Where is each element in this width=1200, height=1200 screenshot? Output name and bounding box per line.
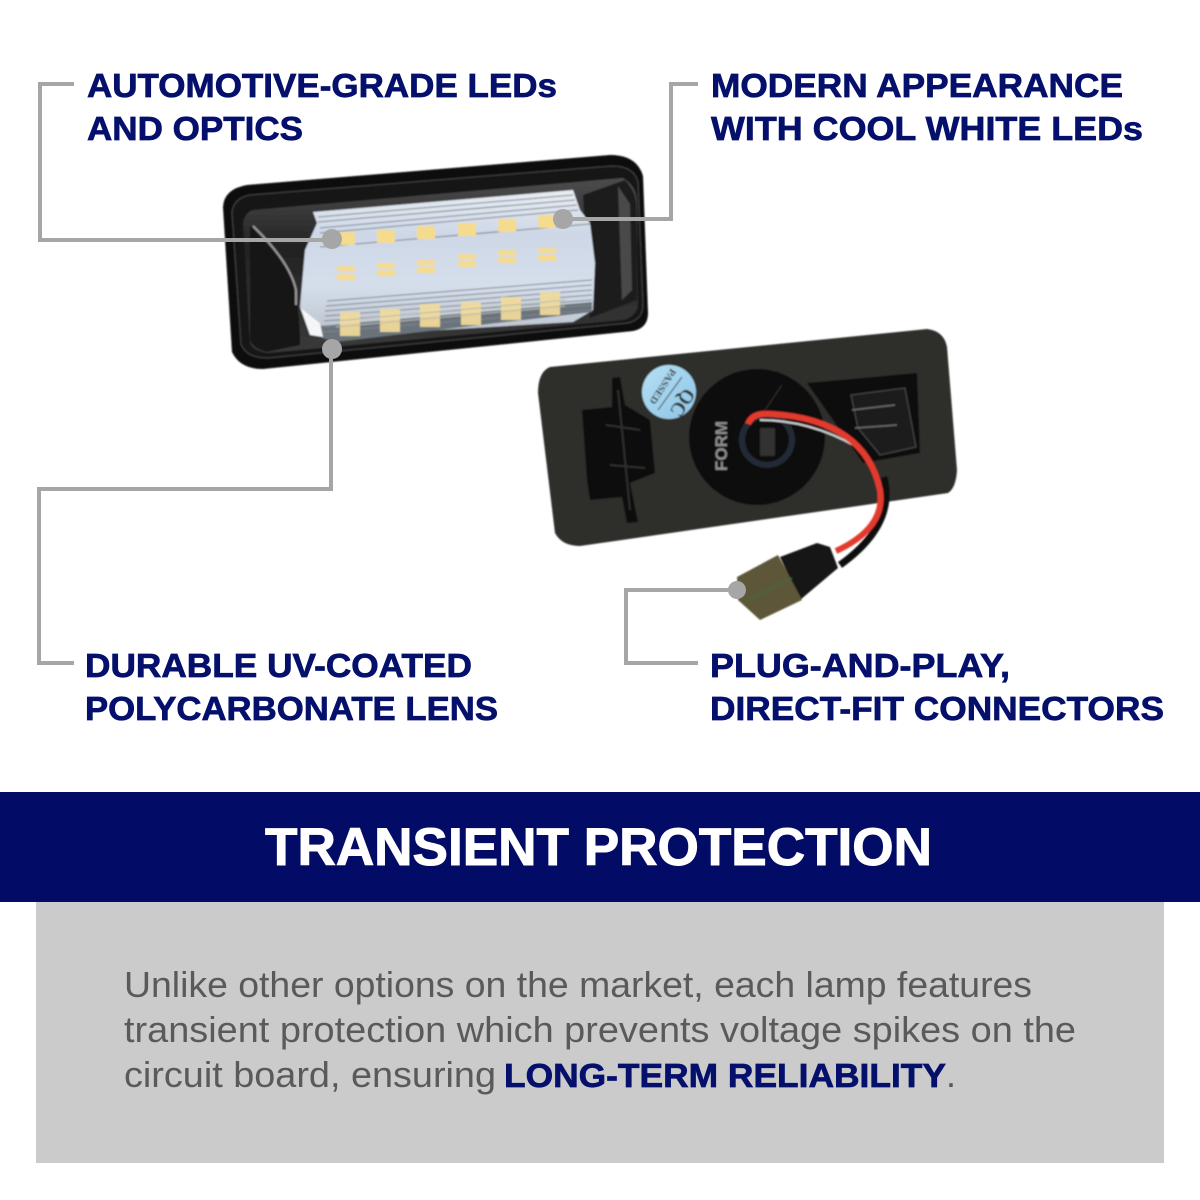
LED rows: [337, 215, 556, 280]
callout: automotive-grade LEDs and optics: [40, 67, 557, 249]
panel: description: circuit board, ensuring: [124, 1054, 496, 1095]
round grommet: [689, 369, 825, 505]
connector circuit board: [737, 555, 802, 620]
callout: durable lens: [39, 339, 498, 727]
photo: rear of licence plate lamp: QC: [665, 384, 699, 421]
photo: rear of licence plate lamp: [538, 329, 957, 620]
callout: modern appearance: MODERN APPEARANCE: [711, 67, 1123, 104]
panel: description: .: [946, 1054, 956, 1095]
callout: durable lens: POLYCARBONATE LENS: [85, 690, 498, 727]
panel: description: LONG-TERM RELIABILITY: [504, 1057, 946, 1094]
LED circuit board: [300, 190, 595, 337]
callout: plug-and-play connectors: PLUG-AND-PLAY,: [710, 647, 1010, 684]
panel: description: [36, 902, 1164, 1163]
photo: rear of licence plate lamp: PASSED: [647, 366, 678, 406]
callout: automotive-grade LEDs and optics: AUTOMOTIVE-GRADE LEDs: [87, 67, 557, 104]
callout: modern appearance: WITH COOL WHITE LEDs: [711, 110, 1143, 147]
panel: description: Unlike other options on the market, each lamp features: [124, 964, 1032, 1005]
callout: modern appearance: [553, 67, 1143, 229]
callout: plug-and-play connectors: [626, 581, 1164, 727]
QC sticker: [642, 365, 696, 419]
connector sleeve: [780, 543, 838, 600]
lens refraction arc: [253, 226, 296, 305]
callout: plug-and-play connectors: DIRECT-FIT CONNECTORS: [710, 690, 1164, 727]
photo: rear of licence plate lamp: FORM: [712, 421, 731, 471]
left mounting clip: [582, 377, 655, 523]
panel: description: transient protection which prevents voltage spikes on the: [124, 1009, 1076, 1050]
wires: [760, 420, 857, 447]
right mounting clip: [807, 373, 920, 463]
callout: automotive-grade LEDs and optics: AND OPTICS: [87, 110, 303, 147]
callout: durable lens: DURABLE UV-COATED: [85, 647, 472, 684]
banner: transient protection: [0, 792, 1200, 902]
banner: transient protection: TRANSIENT PROTECTION: [265, 818, 932, 877]
photo: front of licence plate lamp: [223, 155, 648, 369]
